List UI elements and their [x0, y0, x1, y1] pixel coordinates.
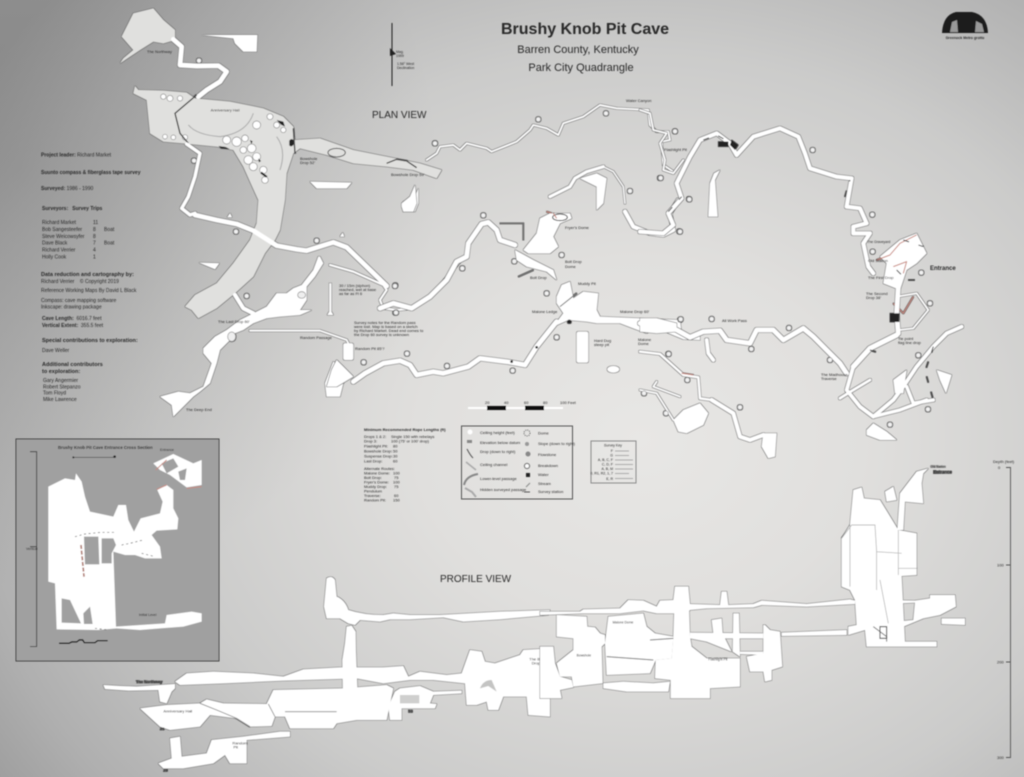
Last Drop complex: [160, 257, 323, 417]
grey arch hole: [480, 680, 497, 692]
plan map place labels: Bowshole Drop 59': [391, 172, 425, 177]
middle level passage: [175, 648, 550, 717]
station markers: [642, 129, 932, 427]
internal survey lines: [842, 525, 917, 623]
entrance shaft complex: [842, 487, 937, 647]
plan map place labels: Fryer's Dome: [565, 225, 590, 230]
Malone Dome maze: [640, 352, 712, 400]
profile view: west section: Drop: [532, 661, 541, 666]
rope length table: Fryer's Dome:: [364, 480, 389, 484]
project credits text block: Compass: cave mapping software: [41, 298, 117, 304]
plan map place labels: The Graveyard: [867, 240, 890, 244]
project credits text block: 11: [93, 220, 98, 226]
plan map place labels: by Richard Market. Dead end comes to: [354, 328, 424, 333]
project credits text block: Bob Sangesteefer: [42, 227, 82, 233]
profile view: east section: Old Station: [931, 465, 946, 469]
plan map place labels: Random Passage: [300, 335, 333, 340]
plan map place labels: Malone Drop 60': [620, 309, 649, 314]
tall shaft: [655, 587, 740, 698]
survey key: E, R: [606, 477, 613, 481]
plan map place labels: steep pit: [594, 342, 610, 347]
map legend: Hidden surveyed passage: [480, 487, 527, 492]
project credits text block: Mike Lawrence: [43, 397, 77, 403]
profile view: west section: 50: [408, 709, 414, 714]
profile view: west section: Random: [232, 740, 248, 745]
north arrow: Mag.: [396, 50, 404, 54]
rope length table: Bowshole Drop:: [364, 448, 392, 454]
Bolt Drop chamber: [515, 250, 557, 280]
inset compass line: [72, 455, 116, 458]
plan map place labels: reached, wet at base: [339, 287, 377, 292]
rope length table: Bolt Drop:: [364, 475, 382, 480]
map legend: Drop (down to right): [480, 449, 516, 454]
plan map place labels: Dome: [638, 341, 649, 346]
rope length table: Drops 1 & 2:: [364, 434, 386, 439]
map legend: Breakdown: [538, 463, 558, 468]
plan map place labels: Bolt Drop: [565, 259, 582, 264]
northern loop passage: [640, 128, 873, 273]
title: Park City Quadrangle: [528, 62, 634, 74]
plan map place labels: Malone: [638, 337, 652, 342]
passage to Anniversary Hall: [173, 39, 227, 97]
depth scale: [993, 459, 1015, 760]
inset title: Brushy Knob Pit Cave Entrance Cross Section: [58, 445, 153, 450]
profile view: west section: [103, 577, 550, 773]
east side passage: [883, 595, 956, 627]
map legend: Water: [538, 472, 549, 477]
upper tower and passage: [324, 577, 550, 625]
rope length table: Pendulum: [364, 488, 383, 494]
rope length table: 100 (75' or 100' drop): [391, 438, 430, 444]
upper dome route: [550, 167, 603, 197]
map legend: Ceiling height (feet): [480, 430, 515, 435]
rope length table: Last Drop:: [364, 458, 382, 464]
map legend: Lower-level passage: [480, 476, 517, 481]
project credits text block: 8: [93, 234, 96, 240]
northway low passage: [103, 684, 175, 703]
plan map place labels: Muddy Pit: [578, 281, 597, 286]
project credits text block: Richard Verrier © Copyright 2019: [41, 278, 119, 285]
survey key: 0, R1, R2, 1, 7: [590, 472, 613, 476]
rope length table: Traverse:: [364, 493, 381, 498]
project credits text block: 8: [93, 227, 96, 233]
heading: plan view: PLAN VIEW: [372, 110, 427, 121]
profile view: west section: Anniversary Hall: [163, 709, 192, 714]
station markers: [192, 58, 437, 315]
plan view: cave map central section: [327, 105, 700, 387]
north arrow: [390, 23, 414, 86]
station markers: [361, 111, 691, 373]
30 foot pit marker: [327, 283, 333, 315]
north arrow: Declination: [397, 66, 414, 70]
project credits text block: Robert Stepanzo: [43, 384, 81, 390]
plan map place labels: Water Canyon: [626, 98, 651, 103]
survey key: [590, 441, 636, 483]
upper passage: [540, 587, 855, 615]
plan map place labels: Malone Ledge: [532, 309, 558, 314]
project credits text block: Richard Market: [42, 220, 77, 226]
map legend: Survey station: [538, 489, 563, 494]
scale bar: 40: [504, 400, 509, 405]
survey key: F: [611, 449, 613, 453]
map legend: [462, 426, 576, 499]
survey key: A, B, C, F: [598, 458, 613, 462]
plan map place labels: The Northway: [147, 49, 172, 54]
project credits text block: Data reduction and cartography by:: [41, 272, 134, 278]
west loop passage: [182, 144, 200, 215]
lower route passage: [640, 323, 847, 373]
plan map place labels: as far as Fl 6: [339, 291, 363, 296]
profile view: east section: Bowshole: [577, 654, 591, 658]
narrow pit: [708, 170, 720, 217]
Random Passage: [250, 331, 350, 347]
The Northway chamber: [120, 8, 175, 63]
Anniversary Hall main trunk: [133, 86, 442, 318]
lower trunk: [235, 295, 253, 313]
icon: grotto logo: [942, 12, 988, 40]
project credits text block: Additional contributors: [42, 362, 103, 368]
title: [501, 21, 669, 74]
isolated pits: [202, 35, 257, 52]
central shaft: [342, 626, 358, 720]
map label: Entrance: Entrance: [930, 266, 956, 272]
project credits text block: 1: [93, 254, 96, 260]
plan map place labels: The First Drop: [868, 275, 894, 280]
plan map place labels: Bolt Drop: [530, 275, 547, 280]
project credits text block: Dave Weller: [42, 348, 69, 354]
profile view: west section: The Bell: [529, 657, 544, 662]
profile view: west section: 29: [160, 726, 165, 731]
route details: [500, 223, 577, 307]
plan map place labels: All Work Pass: [722, 318, 747, 323]
rope length table: Malone Dome:: [364, 470, 390, 476]
rubble field: [161, 94, 286, 183]
rope length table: Flashlight Pit:: [364, 444, 388, 448]
survey key: A, B, M: [602, 467, 613, 471]
Entrance cluster: [880, 233, 927, 290]
chamber at 25 percent: [747, 625, 782, 682]
lowest level: [158, 732, 290, 768]
plan map place labels: The Deep End: [186, 407, 212, 412]
inner chamber wall: [175, 95, 295, 153]
middle route passage: [380, 222, 515, 308]
profile view: east section: Malone Dome: [613, 620, 634, 624]
plan map place labels: Dome: [565, 264, 576, 269]
profile labels: The Northway: [136, 679, 163, 684]
project credits text block: Steve Weicowsyfer: [42, 234, 85, 240]
Malone Dome chamber: [673, 403, 708, 433]
project credits text block: Project leader: Richard Market: [41, 152, 112, 158]
map legend: Stream: [538, 481, 552, 486]
project credits text block: Dave Black: [42, 240, 68, 246]
project credits text block: [41, 152, 141, 403]
plan map place labels: Survey notes for the Random pass: [354, 320, 416, 325]
plan map place labels: [147, 49, 922, 412]
inset labels: Initial Level: [139, 613, 157, 617]
map legend: Dome: [538, 430, 549, 436]
plan view: cave map west section: [120, 8, 460, 417]
map legend: Flowstone: [538, 452, 557, 457]
plan map place labels: Old Station: [868, 258, 888, 263]
survey key: G: [610, 454, 613, 458]
scale bar: 20: [485, 400, 490, 405]
title: Brushy Knob Pit Cave: [501, 21, 669, 38]
Malone Dome connector: [553, 282, 700, 340]
inset panel: entrance cross section: [16, 439, 219, 661]
rope length table: Drop 3:: [364, 438, 377, 444]
depth scale: Depth (feet): [993, 459, 1015, 464]
profile view: east section: [540, 465, 965, 698]
rope length table: 100: [393, 480, 400, 484]
plan map place labels: The Madhouse: [821, 372, 848, 377]
entrance loop: [897, 293, 928, 330]
side chambers: [388, 686, 462, 720]
depth scale: 300: [997, 755, 1004, 760]
map legend: Slope (down to right): [538, 441, 576, 446]
rope length table: 60: [393, 458, 398, 464]
survey key: C, D, F: [602, 462, 613, 466]
plan map place labels: Tie point: [898, 336, 914, 341]
scale bar: 100 Feet: [560, 400, 577, 405]
Anniversary Hall and lower hall: [140, 685, 393, 730]
icon: grotto logo: Greenock Metro grotto: [946, 36, 985, 40]
north arrow: 1.58° West: [397, 62, 414, 66]
plan map place labels: The Last Drop 60': [218, 319, 250, 324]
project credits text block: to exploration:: [42, 369, 80, 375]
plan map place labels: were lost. Map is based on a sketch: [354, 324, 418, 329]
plan map place labels: Hard Dug: [594, 338, 611, 343]
inset depth scale: [30, 452, 37, 647]
project credits text block: Richard Verrier: [42, 248, 76, 254]
project credits text block: Special contributions to exploration:: [42, 338, 138, 344]
plan map place labels: Bowshole: [300, 156, 318, 161]
project credits text block: Tom Floyd: [43, 390, 66, 396]
rope length table: Single 150 with rebelays: [391, 434, 434, 439]
inset panel: entrance cross section: Vertical: [26, 547, 38, 551]
plan map place labels: Traverse: [821, 376, 837, 381]
project credits text block: 4: [93, 248, 96, 254]
plan map place labels: The Second: [866, 291, 888, 296]
profile view: east section: Flashlight Pit: [708, 658, 727, 662]
project credits text block: Surveyors: Survey Trips: [42, 206, 103, 212]
rope length table: 30: [393, 454, 398, 458]
project credits text block: Boat: [104, 240, 115, 246]
inset scale bar: [59, 640, 108, 643]
rope length table: 60: [394, 493, 399, 498]
map legend: Ceiling channel: [480, 462, 507, 467]
depth scale: 0: [998, 465, 1001, 470]
lower route passage: [353, 322, 557, 382]
plan map place labels: the Drop 60 survey is unknown: [354, 332, 409, 337]
plan map place labels: Flashlight Pit: [664, 147, 688, 152]
project credits text block: Inkscape: drawing package: [41, 304, 102, 310]
scale bar: [468, 400, 577, 410]
rope length table: Minimum Recommended Rope Lengths (ft): [364, 427, 446, 432]
plan map place labels: flag line drop: [898, 340, 922, 345]
inset cave profile: [48, 454, 202, 630]
profile view: west section: 29: [163, 768, 169, 773]
plan map place labels: Drop 52': [300, 160, 315, 165]
rope length table: 75: [394, 475, 399, 480]
project credits text block: Gary Angermier: [43, 378, 78, 384]
scale bar: 80: [543, 400, 548, 405]
heading: profile view: PROFILE VIEW: [440, 574, 512, 585]
Anniversary Hall label: Anniversary Hall: [211, 108, 240, 113]
rope length table: 80: [393, 444, 398, 448]
plan map place labels: 30 / 15m (siphon): [339, 283, 371, 288]
inset panel: entrance cross section: Entrance: [160, 448, 174, 452]
profile labels: Entrance: [933, 469, 952, 474]
Southeast maze: [847, 327, 962, 417]
rope length table: 50: [393, 448, 398, 454]
thin survey passage: [640, 110, 683, 173]
chamber blocks: [557, 615, 605, 687]
project credits text block: 7: [93, 240, 96, 246]
rope length table: 100: [393, 470, 400, 476]
Fryers Dome cluster: [523, 213, 572, 253]
project credits text block: Vertical Extent: 355.5 feet: [42, 323, 104, 329]
map legend: Elevation below datum: [480, 440, 521, 445]
survey key: Survey Key: [604, 444, 622, 448]
pits: [577, 332, 588, 363]
scale bar: 60: [524, 400, 529, 405]
rope length table: 150: [393, 498, 400, 502]
project credits text block: Surveyed: 1986 - 1990: [41, 186, 93, 192]
rope length table: Alternate Routes:: [364, 466, 395, 471]
depth scale: 200: [997, 660, 1004, 664]
rope length table: 75: [394, 484, 399, 489]
project credits text block: Cave Length: 6016.7 feet: [42, 316, 102, 322]
project credits text block: Holly Cook: [42, 254, 67, 260]
rope length table: [364, 427, 446, 502]
plan view: Entrance section: [640, 110, 962, 458]
rope length table: Suspense Drop:: [364, 454, 393, 458]
upper route passage: [427, 105, 673, 172]
project credits text block: Reference Working Maps By David L Black: [41, 288, 137, 294]
profile view: west section: Pit: [233, 744, 239, 749]
project credits text block: Suunto compass & fiberglass tape survey: [41, 170, 141, 176]
title: Barren County, Kentucky: [517, 44, 639, 56]
plan map place labels: Drop 38': [866, 295, 881, 300]
depth scale: 100: [997, 562, 1004, 568]
crossover passage: [195, 215, 387, 286]
north arrow: 1999: [396, 54, 404, 58]
project credits text block: Boat: [104, 227, 115, 233]
rope length table: Muddy Drop:: [364, 484, 387, 489]
plan map place labels: Random Pit 85'?: [355, 346, 385, 351]
rope length table: Random Pit:: [364, 498, 386, 502]
